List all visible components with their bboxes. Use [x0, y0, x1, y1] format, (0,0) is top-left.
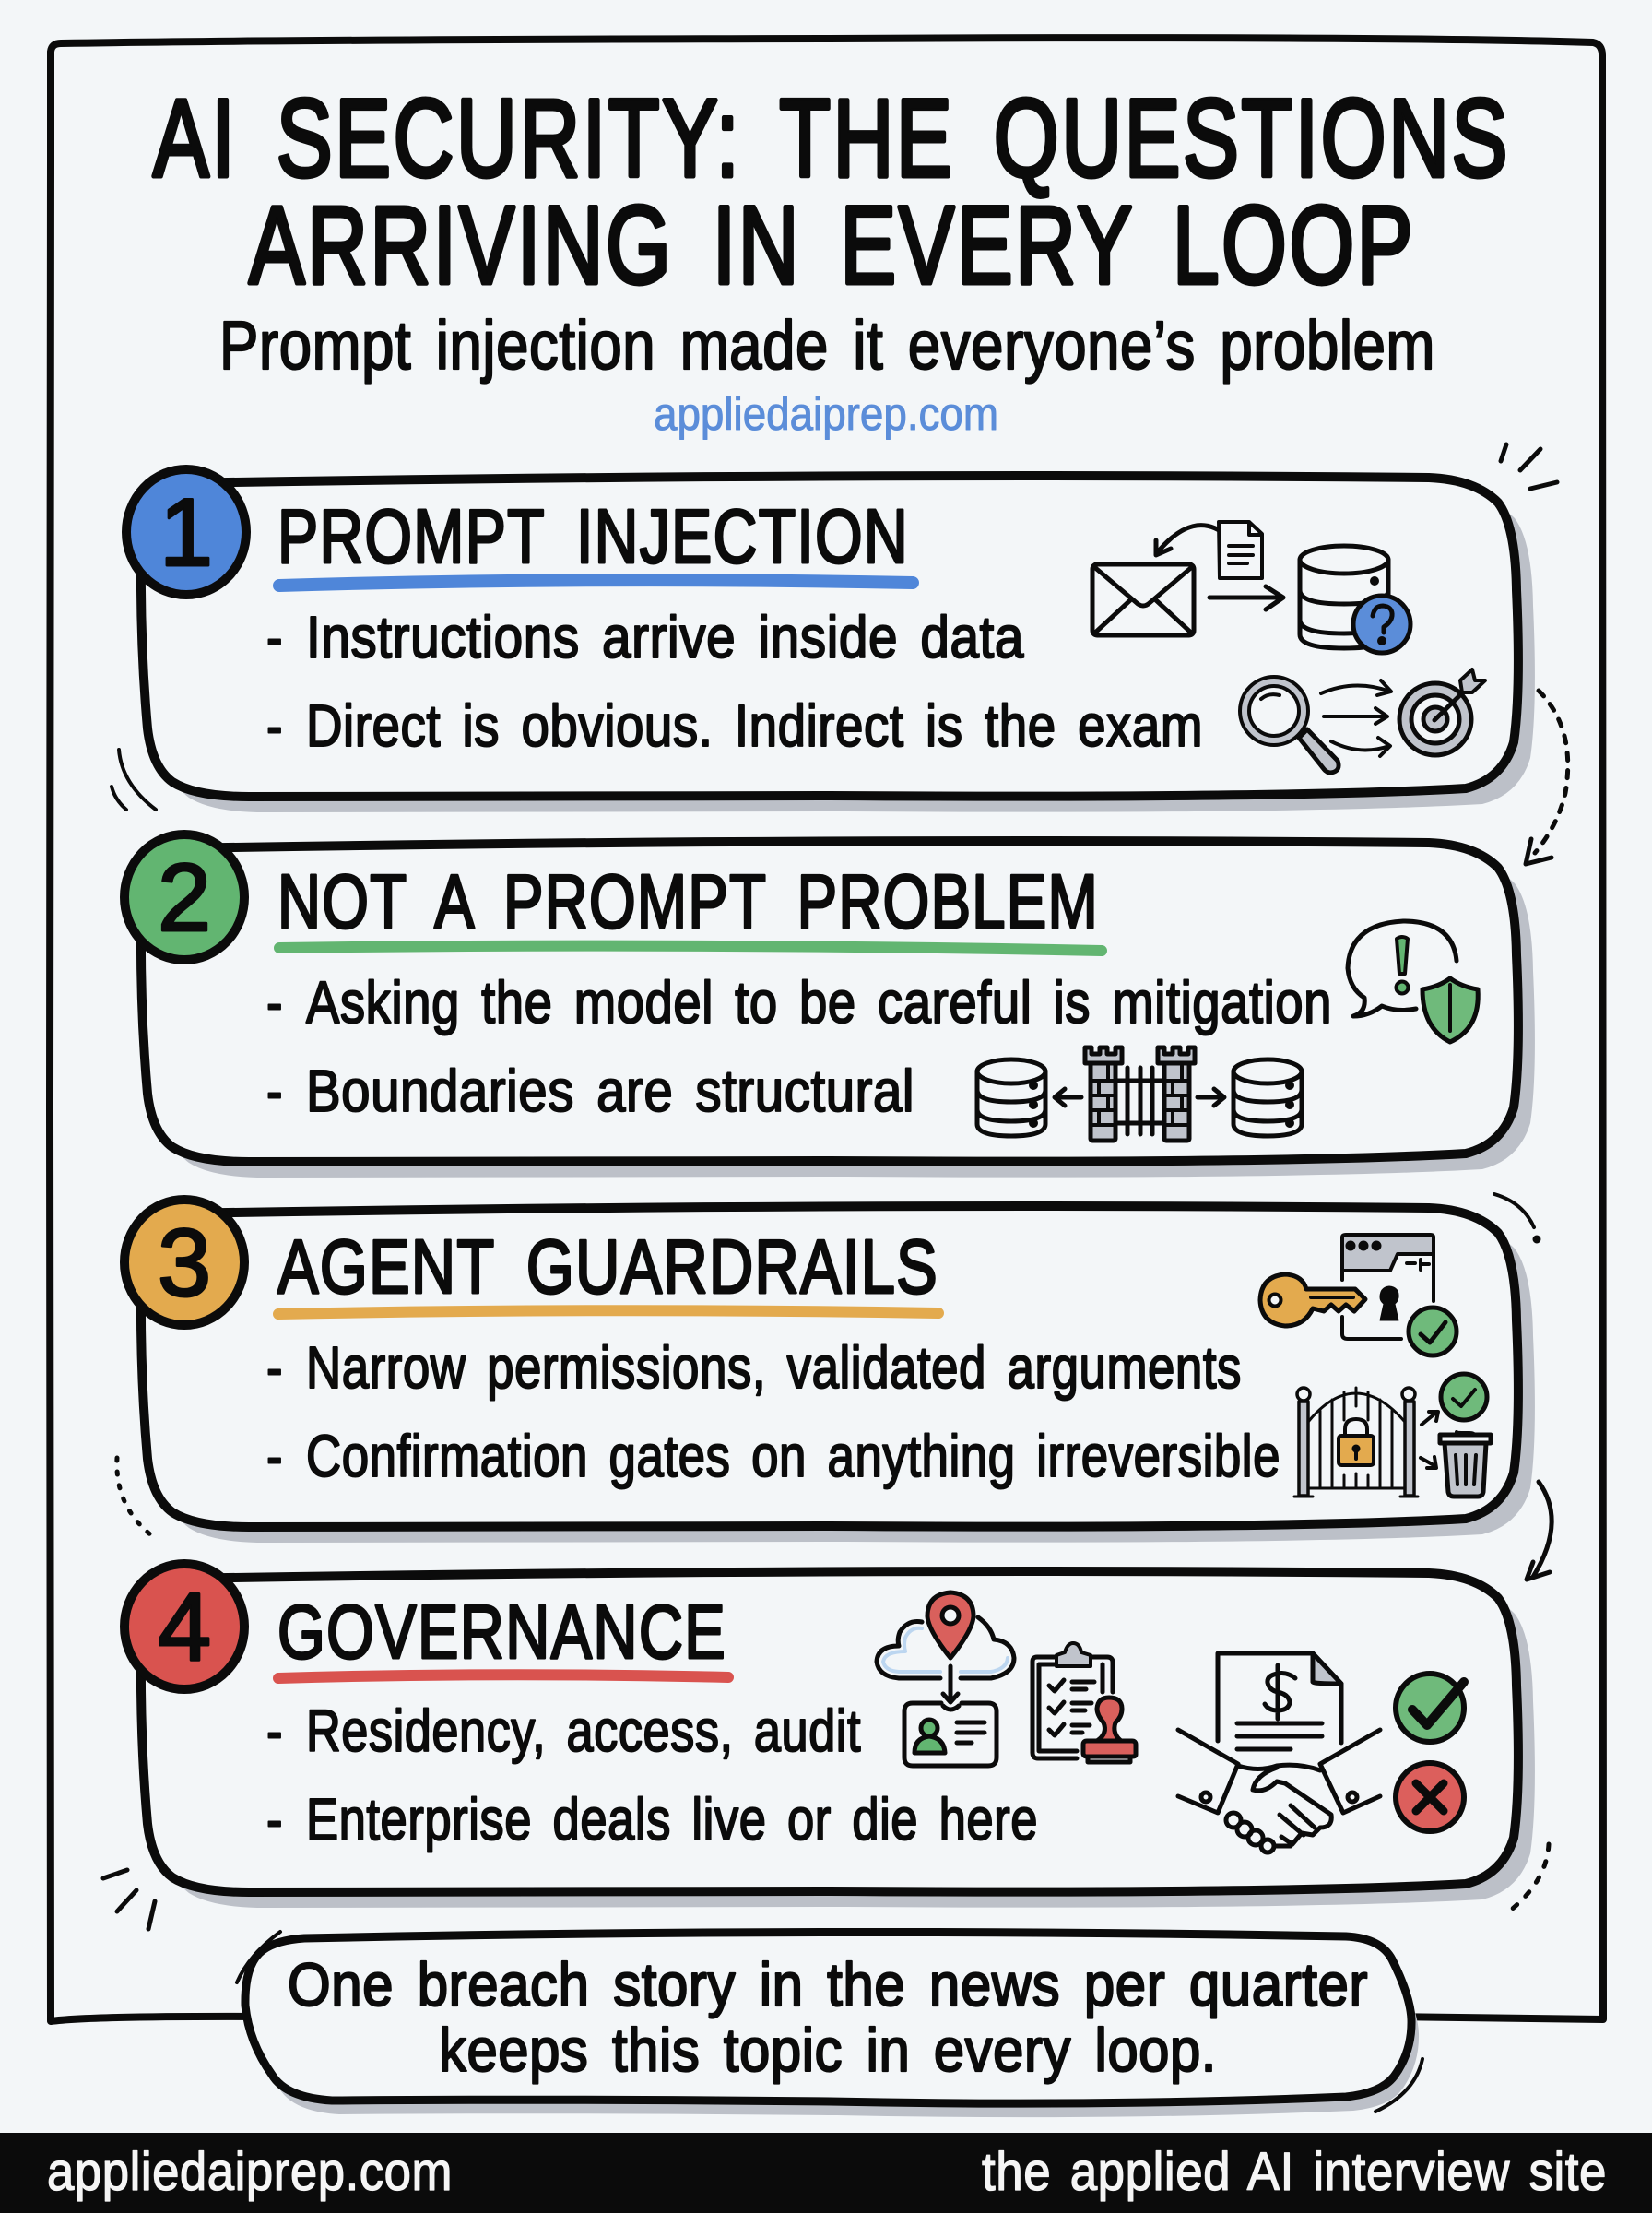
- bullet 3b: -: [266, 1423, 283, 1489]
- icon: envelope to database: [1092, 522, 1410, 653]
- heading 2 underline: [279, 946, 1102, 951]
- icon: magnifier and target: [1240, 669, 1485, 773]
- castle tower left: [1085, 1047, 1122, 1141]
- decoration: panel 3 top-right arc: [1494, 1194, 1540, 1241]
- icon: contract and handshake: [1178, 1653, 1380, 1852]
- check circle: [1396, 1674, 1464, 1742]
- footer bar: appliedaiprep.com: [47, 2142, 453, 2202]
- bullet 2b: Boundaries are structural: [306, 1058, 914, 1124]
- icon: key and locked window: [1260, 1235, 1457, 1355]
- decoration: callout top-left ticks: [237, 1932, 280, 1982]
- website link: appliedaiprep.com: [654, 388, 998, 440]
- bullet 1b: -: [266, 692, 283, 759]
- heading 3: AGENT GUARDRAILS: [277, 1224, 938, 1309]
- bullet 1a: Instructions arrive inside data: [306, 604, 1024, 670]
- number badge 2: 2: [158, 845, 211, 952]
- callout: closing statement: keeps this topic in every loop.: [439, 2016, 1217, 2084]
- bullet 4a: Residency, access, audit: [306, 1698, 861, 1764]
- number badge 3: [124, 1200, 244, 1325]
- title: [153, 77, 1510, 307]
- bullet 2a: Asking the model to be careful is mitigation: [306, 969, 1332, 1035]
- bullet 1a: -: [266, 604, 283, 670]
- callout: closing statement: [245, 1932, 1419, 2117]
- bullet 1b: Direct is obvious. Indirect is the exam: [306, 692, 1203, 759]
- panel 2: not a prompt problem: [124, 834, 1535, 1178]
- bullet 3b: Confirmation gates on anything irreversible: [306, 1423, 1280, 1489]
- footer bar: [0, 2133, 1652, 2213]
- decoration: panel 4 bottom-right dotted arc: [1509, 1844, 1549, 1911]
- number badge 1: 1: [159, 479, 213, 586]
- panel 1: prompt injection: [126, 469, 1535, 812]
- panel 3 shadow and card: [141, 1206, 1535, 1543]
- database left: [977, 1059, 1045, 1136]
- bullet 2b: -: [266, 1058, 283, 1124]
- heading 2: NOT A PROMPT PROBLEM: [277, 858, 1099, 944]
- footer bar: the applied AI interview site: [982, 2142, 1607, 2202]
- arrow: dashed from panel 1 to panel 2: [1526, 691, 1568, 864]
- subtitle: Prompt injection made it everyone’s problem: [219, 307, 1435, 384]
- bullet 4b: -: [266, 1786, 283, 1852]
- heading 4: GOVERNANCE: [277, 1589, 726, 1675]
- decoration: panel 1 bottom-left arcs: [112, 750, 156, 810]
- panel 4 shadow and card: [141, 1571, 1535, 1908]
- icon: cloud pin and ID card: [877, 1592, 1014, 1766]
- icon: clipboard and stamp: [1032, 1643, 1136, 1762]
- icon: castle gate between databases: [977, 1047, 1302, 1141]
- database right: [1233, 1059, 1302, 1136]
- bullet 3a: -: [266, 1334, 283, 1401]
- panel 1 shadow and card: [141, 476, 1535, 812]
- arrow: panel 3 to panel 4: [1527, 1482, 1552, 1580]
- icon: check and cross: [1396, 1674, 1464, 1831]
- bullet 3a: Narrow permissions, validated arguments: [306, 1334, 1242, 1401]
- heading 1 underline: [279, 580, 913, 586]
- bullet 2a: -: [266, 969, 283, 1035]
- number badge 1: [126, 469, 246, 595]
- heading 3 underline: [278, 1310, 938, 1314]
- number badge 2: [124, 834, 244, 960]
- icon: speech bubble and shield: [1348, 921, 1478, 1042]
- number badge 4: [124, 1564, 244, 1689]
- decoration: panel 1 top-right spark lines: [1501, 444, 1557, 489]
- number badge 4: 4: [158, 1574, 211, 1681]
- heading 4 underline: [278, 1675, 728, 1678]
- cross circle: [1396, 1763, 1464, 1831]
- panel 3: agent guardrails: [124, 1200, 1535, 1543]
- decoration: panel 4 bottom-left spark lines: [103, 1870, 155, 1929]
- decoration: callout bottom-right ticks: [1375, 2059, 1422, 2112]
- bullet 4a: -: [266, 1698, 283, 1764]
- heading 1: PROMPT INJECTION: [277, 493, 909, 579]
- panel 2 shadow and card: [141, 841, 1535, 1178]
- decoration: panel 3 left dotted arc: [117, 1458, 155, 1538]
- number badge 3: 3: [158, 1210, 211, 1317]
- panel 4: governance: [124, 1564, 1535, 1908]
- bullet 4b: Enterprise deals live or die here: [306, 1786, 1038, 1852]
- callout: closing statement: One breach story in the news per quarter: [288, 1950, 1368, 2018]
- castle tower right: [1158, 1047, 1195, 1141]
- icon: locked gate with check and trash: [1294, 1374, 1491, 1497]
